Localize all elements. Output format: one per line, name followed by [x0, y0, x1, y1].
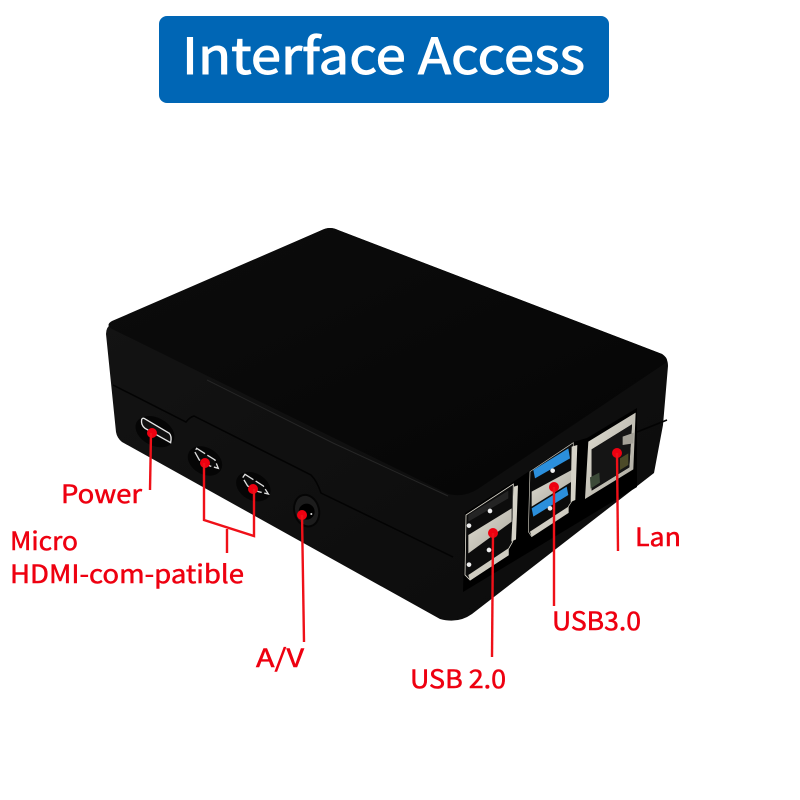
case body silhouette: [106, 228, 668, 621]
callout: Micro HDMI: [10, 458, 258, 591]
callout: A/V: A/V: [256, 639, 305, 675]
side ports: [130, 410, 323, 529]
callout: USB3.0: USB3.0: [552, 602, 641, 638]
title banner: [159, 16, 609, 103]
callout: A/V: [256, 510, 307, 675]
HDMI port 1: [182, 440, 228, 482]
callout: Micro HDMI: HDMI-com-patible: [10, 555, 244, 591]
title banner: Interface Access: [182, 17, 585, 89]
callout: Micro HDMI: Micro: [10, 522, 78, 558]
callout: Lan: Lan: [635, 518, 681, 554]
callout: Power: Power: [61, 475, 142, 511]
port panel: [463, 408, 637, 592]
callout: USB 2.0: USB 2.0: [410, 660, 506, 696]
black case: [106, 228, 668, 621]
LAN port: [585, 413, 636, 499]
callout: USB 2.0: [410, 528, 506, 696]
callout: USB3.0: [549, 482, 641, 638]
rear ports: [465, 413, 636, 581]
callout: Power: [61, 428, 157, 511]
HDMI port 2: [231, 466, 276, 507]
USB 3.0 ports: [528, 443, 577, 537]
callout: Lan: [612, 448, 681, 554]
case top face: [108, 228, 667, 495]
audio jack: [291, 492, 323, 529]
callouts: [10, 428, 681, 696]
USB 2.0 ports: [465, 484, 518, 581]
power port: [130, 410, 180, 454]
